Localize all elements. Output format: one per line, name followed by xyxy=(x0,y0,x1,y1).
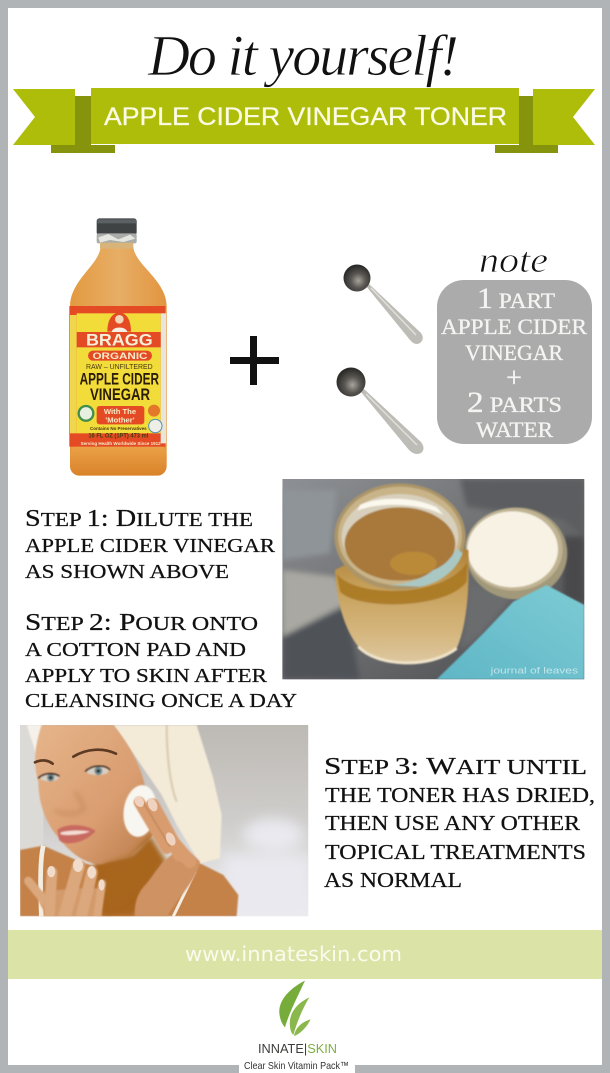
step 3 text: TOPICAL TREATMENTS xyxy=(325,840,586,864)
step 1 text: STEP 1: D ILUTE THE xyxy=(25,505,253,532)
measuring spoon top xyxy=(344,264,423,344)
eyes xyxy=(38,766,110,781)
face xyxy=(35,725,153,864)
note text: VINEGAR xyxy=(465,340,563,365)
ribbon fold shadows xyxy=(51,96,558,153)
leaf icon xyxy=(279,981,311,1036)
left hand xyxy=(28,866,102,916)
bottle label: 16 FL OZ (1PT) 473 ml xyxy=(88,434,149,440)
note text xyxy=(441,282,587,442)
step 2 text: CLEANSING ONCE A DAY xyxy=(25,690,297,712)
neck shadow xyxy=(100,835,167,916)
step 1 text: APPLE CIDER VINEGAR xyxy=(25,535,276,557)
left hand nails xyxy=(47,859,105,891)
step 3 text: THE TONER HAS DRIED, xyxy=(325,783,595,807)
note text: APPLE CIDER xyxy=(441,314,587,339)
banner heading: APPLE CIDER VINEGAR TONER xyxy=(104,103,507,131)
logo wordmark: INNATE|SKIN xyxy=(258,1041,337,1056)
step 3 text xyxy=(324,753,595,892)
right hand xyxy=(135,802,200,916)
bottle label: Serving Health Worldwide Since 1912 xyxy=(81,441,161,447)
stone surface xyxy=(282,479,584,679)
ribbon tails xyxy=(13,89,595,145)
step 2 text xyxy=(25,609,297,712)
bottle label: ORGANIC xyxy=(92,351,148,361)
step 1 text: AS SHOWN ABOVE xyxy=(25,561,229,583)
bottle label: VINEGAR xyxy=(90,385,150,404)
measuring spoon bottom xyxy=(336,368,424,454)
photo: woman applying toner xyxy=(20,725,310,918)
nose shadow xyxy=(55,792,83,814)
jar lid xyxy=(465,507,567,599)
bottle glass xyxy=(70,247,167,475)
step 3 text: AS NORMAL xyxy=(324,868,462,892)
note text: 1 PART xyxy=(477,282,556,315)
step 3 text: STEP 3: W AIT UNTIL xyxy=(324,753,587,780)
top straps xyxy=(41,846,195,916)
blurred bedding xyxy=(223,814,308,892)
watermark: journal of leaves xyxy=(489,665,579,675)
step 2 text: APPLY TO SKIN AFTER xyxy=(25,665,268,687)
towel wrap xyxy=(27,725,222,863)
cotton pad xyxy=(122,784,156,838)
innate skin logo xyxy=(244,981,349,1072)
towel xyxy=(437,585,584,679)
logo tagline: Clear Skin Vitamin Pack™ xyxy=(244,1060,349,1072)
website band xyxy=(8,930,602,979)
title script: Do it yourself! xyxy=(147,23,459,88)
website url: www.innateskin.com xyxy=(185,942,402,966)
shoulders xyxy=(20,846,238,916)
note text: WATER xyxy=(476,417,553,442)
jar body xyxy=(335,537,469,663)
note label: note xyxy=(479,240,548,280)
bottle cap xyxy=(97,218,137,249)
vinegar bottle xyxy=(69,218,167,476)
eyebrows xyxy=(35,750,116,764)
plus sign xyxy=(230,336,279,385)
step 3 text: THEN USE ANY OTHER xyxy=(325,811,580,835)
note box xyxy=(437,280,592,444)
lips xyxy=(57,825,96,843)
note text: + xyxy=(506,363,522,394)
jar mouth xyxy=(334,483,466,590)
bottle label xyxy=(69,306,166,447)
bottle label: Contains No Preservatives xyxy=(90,426,147,431)
ribbon centre xyxy=(91,88,519,144)
ribbon banner xyxy=(13,88,595,153)
step 1 text xyxy=(25,505,276,583)
bottle label: 'Mother' xyxy=(105,415,135,424)
bottle label: APPLE CIDER xyxy=(80,369,159,388)
bottle label: RAW – UNFILTERED xyxy=(86,362,153,371)
photo: jar of toner xyxy=(282,479,584,679)
bottle label: BRAGG xyxy=(86,330,153,349)
bottle label: With The xyxy=(104,407,136,416)
fingernails xyxy=(134,796,176,846)
step 2 text: STEP 2: P OUR ONTO xyxy=(25,609,258,636)
step 2 text: A COTTON PAD AND xyxy=(25,639,246,661)
note text: 2 PARTS xyxy=(467,386,562,419)
